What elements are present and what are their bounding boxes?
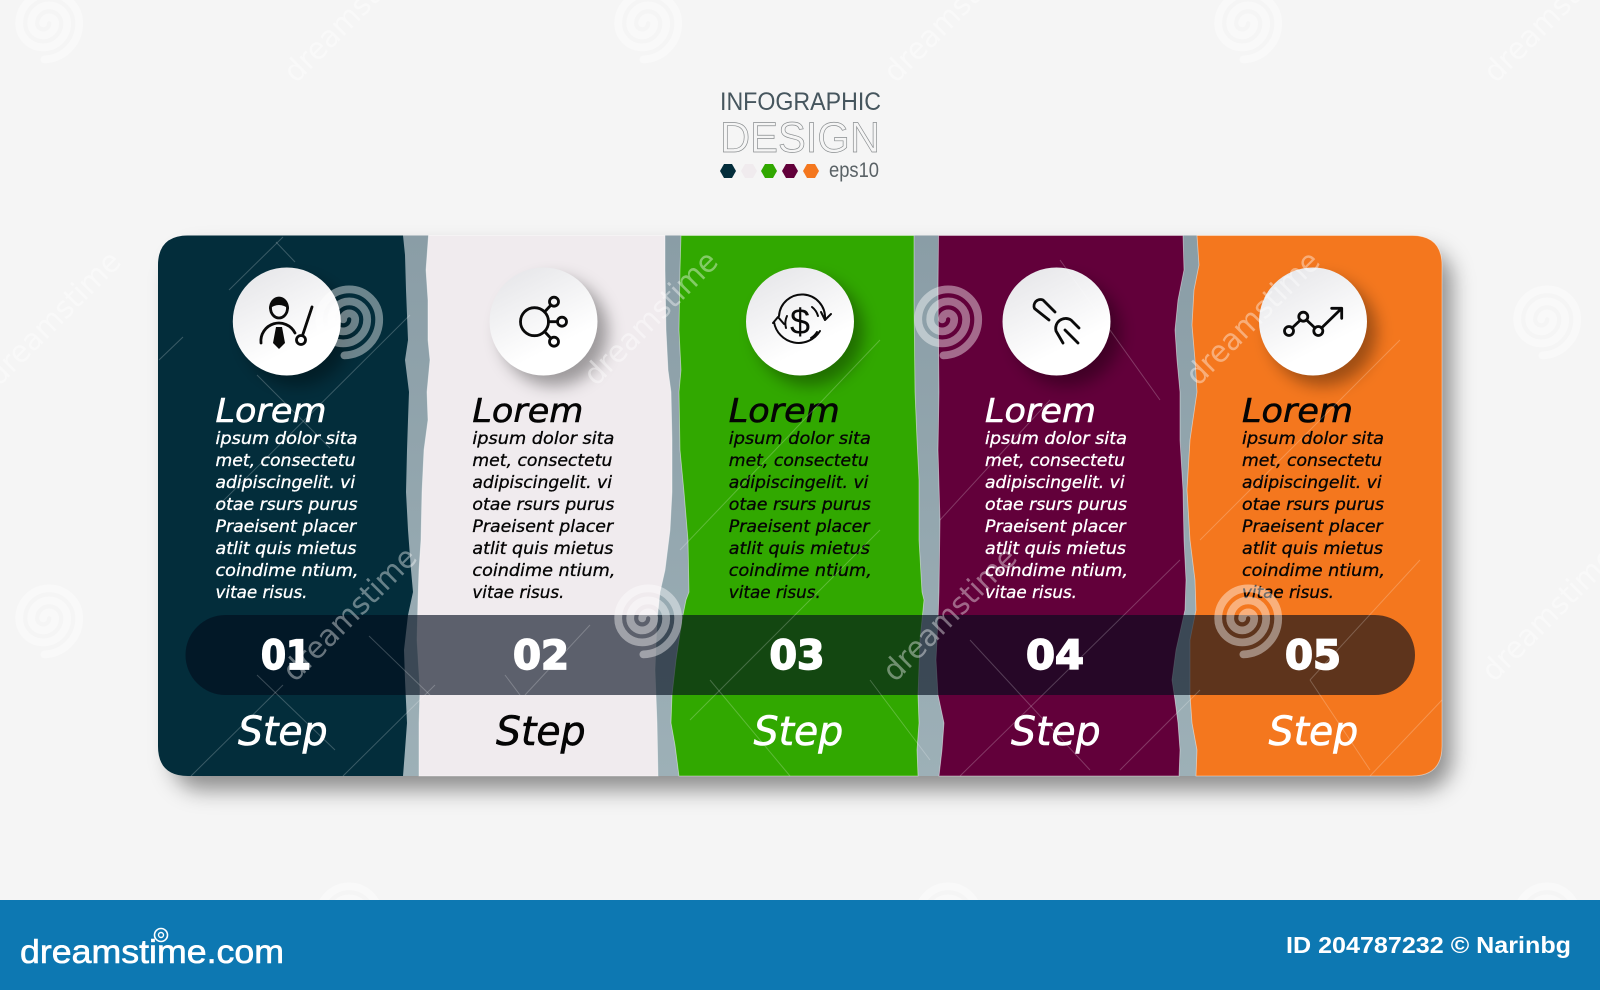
number 04: 04 bbox=[1026, 633, 1084, 679]
number 01: 01 bbox=[261, 633, 311, 679]
icon circle 2 bbox=[490, 268, 608, 386]
body text 4: coindime ntium, bbox=[985, 561, 1128, 580]
body text 3: met, consectetu bbox=[729, 451, 869, 470]
icon circle 4 bbox=[1002, 268, 1121, 386]
body text 5: atlit quis mietus bbox=[1242, 539, 1383, 558]
body text 1: met, consectetu bbox=[216, 451, 356, 470]
body text 5: adipiscingelit. vi bbox=[1242, 473, 1382, 492]
body text 3: atlit quis mietus bbox=[729, 539, 870, 558]
body text 4: atlit quis mietus bbox=[985, 539, 1126, 558]
icon: hub network bbox=[520, 297, 566, 346]
footer band bbox=[0, 900, 1600, 990]
body text 3: coindime ntium, bbox=[729, 561, 872, 580]
body text 5: ipsum dolor sita bbox=[1242, 429, 1384, 448]
icon: dollar exchange bbox=[773, 294, 831, 343]
icon: presenter with pointer bbox=[261, 298, 312, 349]
heading 2: Lorem bbox=[472, 391, 583, 430]
panel: column 3 green bbox=[671, 236, 924, 776]
body text 2: coindime ntium, bbox=[472, 561, 615, 580]
body text 3: ipsum dolor sita bbox=[729, 429, 871, 448]
body text 4: Praeisent placer bbox=[985, 517, 1127, 536]
number band bbox=[186, 615, 1415, 695]
number 02: 02 bbox=[513, 633, 569, 679]
eps10 label: eps10 bbox=[829, 159, 879, 182]
watermark layer: dreamstime bbox=[276, 540, 424, 689]
body text 2: atlit quis mietus bbox=[472, 539, 614, 558]
body text 5: otae rsurs purus bbox=[1242, 495, 1384, 514]
panel: column 2 light bbox=[417, 236, 672, 776]
heading 1: Lorem bbox=[216, 391, 326, 430]
body text 4: otae rsurs purus bbox=[985, 495, 1127, 514]
icon: fork and link bbox=[1034, 300, 1079, 343]
number 03: 03 bbox=[770, 633, 824, 679]
step label 1: Step bbox=[238, 709, 328, 755]
torn gap backing bbox=[158, 236, 1442, 776]
body text 2: met, consectetu bbox=[472, 451, 612, 470]
step 1 content bbox=[216, 268, 358, 755]
body text 3 bbox=[729, 429, 872, 602]
body text 2 bbox=[472, 429, 615, 602]
title block bbox=[720, 88, 881, 182]
body text 2: ipsum dolor sita bbox=[472, 429, 614, 448]
watermark layer: dreamstime bbox=[1179, 244, 1327, 393]
body text 5: vitae risus. bbox=[1242, 583, 1334, 602]
heading 5: Lorem bbox=[1242, 391, 1353, 430]
body text 5: Praeisent placer bbox=[1242, 517, 1384, 536]
body text 2: vitae risus. bbox=[472, 583, 564, 602]
step label 2: Step bbox=[496, 709, 586, 755]
body text 5 bbox=[1242, 429, 1385, 602]
step 4 content bbox=[985, 268, 1128, 755]
body text 3: otae rsurs purus bbox=[729, 495, 871, 514]
body text 1: adipiscingelit. vi bbox=[216, 473, 356, 492]
icon circle 1 bbox=[233, 268, 351, 386]
footer logo: dreamstime.com: dreamstime.com bbox=[20, 933, 284, 970]
icon: dollar exchange: $ bbox=[790, 301, 810, 342]
body text 3: vitae risus. bbox=[729, 583, 821, 602]
body text 4: ipsum dolor sita bbox=[985, 429, 1127, 448]
colour hexagons bbox=[720, 164, 819, 178]
body text 3: Praeisent placer bbox=[729, 517, 871, 536]
icon circle 5 bbox=[1259, 268, 1377, 386]
body text 2: Praeisent placer bbox=[472, 517, 614, 536]
body text 1: atlit quis mietus bbox=[216, 539, 357, 558]
body text 4: vitae risus. bbox=[985, 583, 1077, 602]
body text 1: coindime ntium, bbox=[216, 561, 358, 580]
step 5 content bbox=[1242, 268, 1385, 755]
step 3 content bbox=[729, 268, 872, 755]
panel: column 1 dark bbox=[158, 236, 413, 776]
body text 1 bbox=[216, 429, 358, 602]
icon: trend line arrow bbox=[1284, 308, 1342, 336]
body text 4: met, consectetu bbox=[985, 451, 1125, 470]
body text 2: otae rsurs purus bbox=[472, 495, 615, 514]
panel: column 5 orange bbox=[1187, 236, 1442, 776]
body text 1: ipsum dolor sita bbox=[216, 429, 358, 448]
body text 5: coindime ntium, bbox=[1242, 561, 1385, 580]
watermark layer: dreamstime bbox=[876, 540, 1024, 689]
panel: column 4 purple bbox=[936, 236, 1186, 776]
body text 4 bbox=[985, 429, 1128, 602]
body text 1: otae rsurs purus bbox=[216, 495, 358, 514]
card shadow bbox=[172, 250, 1452, 790]
footer credit: ID 204787232 © Narinbg bbox=[1286, 932, 1571, 958]
number 05: 05 bbox=[1285, 633, 1341, 679]
body text 1: vitae risus. bbox=[216, 583, 308, 602]
title: DESIGN: DESIGN bbox=[720, 114, 880, 162]
step label 3: Step bbox=[754, 709, 843, 755]
step 2 content bbox=[472, 268, 615, 755]
step label 4: Step bbox=[1011, 709, 1101, 755]
body text 1: Praeisent placer bbox=[216, 517, 357, 536]
body text 5: met, consectetu bbox=[1242, 451, 1382, 470]
watermark layer: dreamstime bbox=[577, 244, 725, 393]
heading 3: Lorem bbox=[729, 391, 840, 430]
body text 3: adipiscingelit. vi bbox=[729, 473, 869, 492]
heading 4: Lorem bbox=[985, 391, 1096, 430]
body text 2: adipiscingelit. vi bbox=[472, 473, 612, 492]
title: INFOGRAPHIC: INFOGRAPHIC bbox=[720, 88, 881, 116]
step label 5: Step bbox=[1269, 709, 1358, 755]
icon circle 3 bbox=[746, 268, 864, 386]
body text 4: adipiscingelit. vi bbox=[985, 473, 1125, 492]
